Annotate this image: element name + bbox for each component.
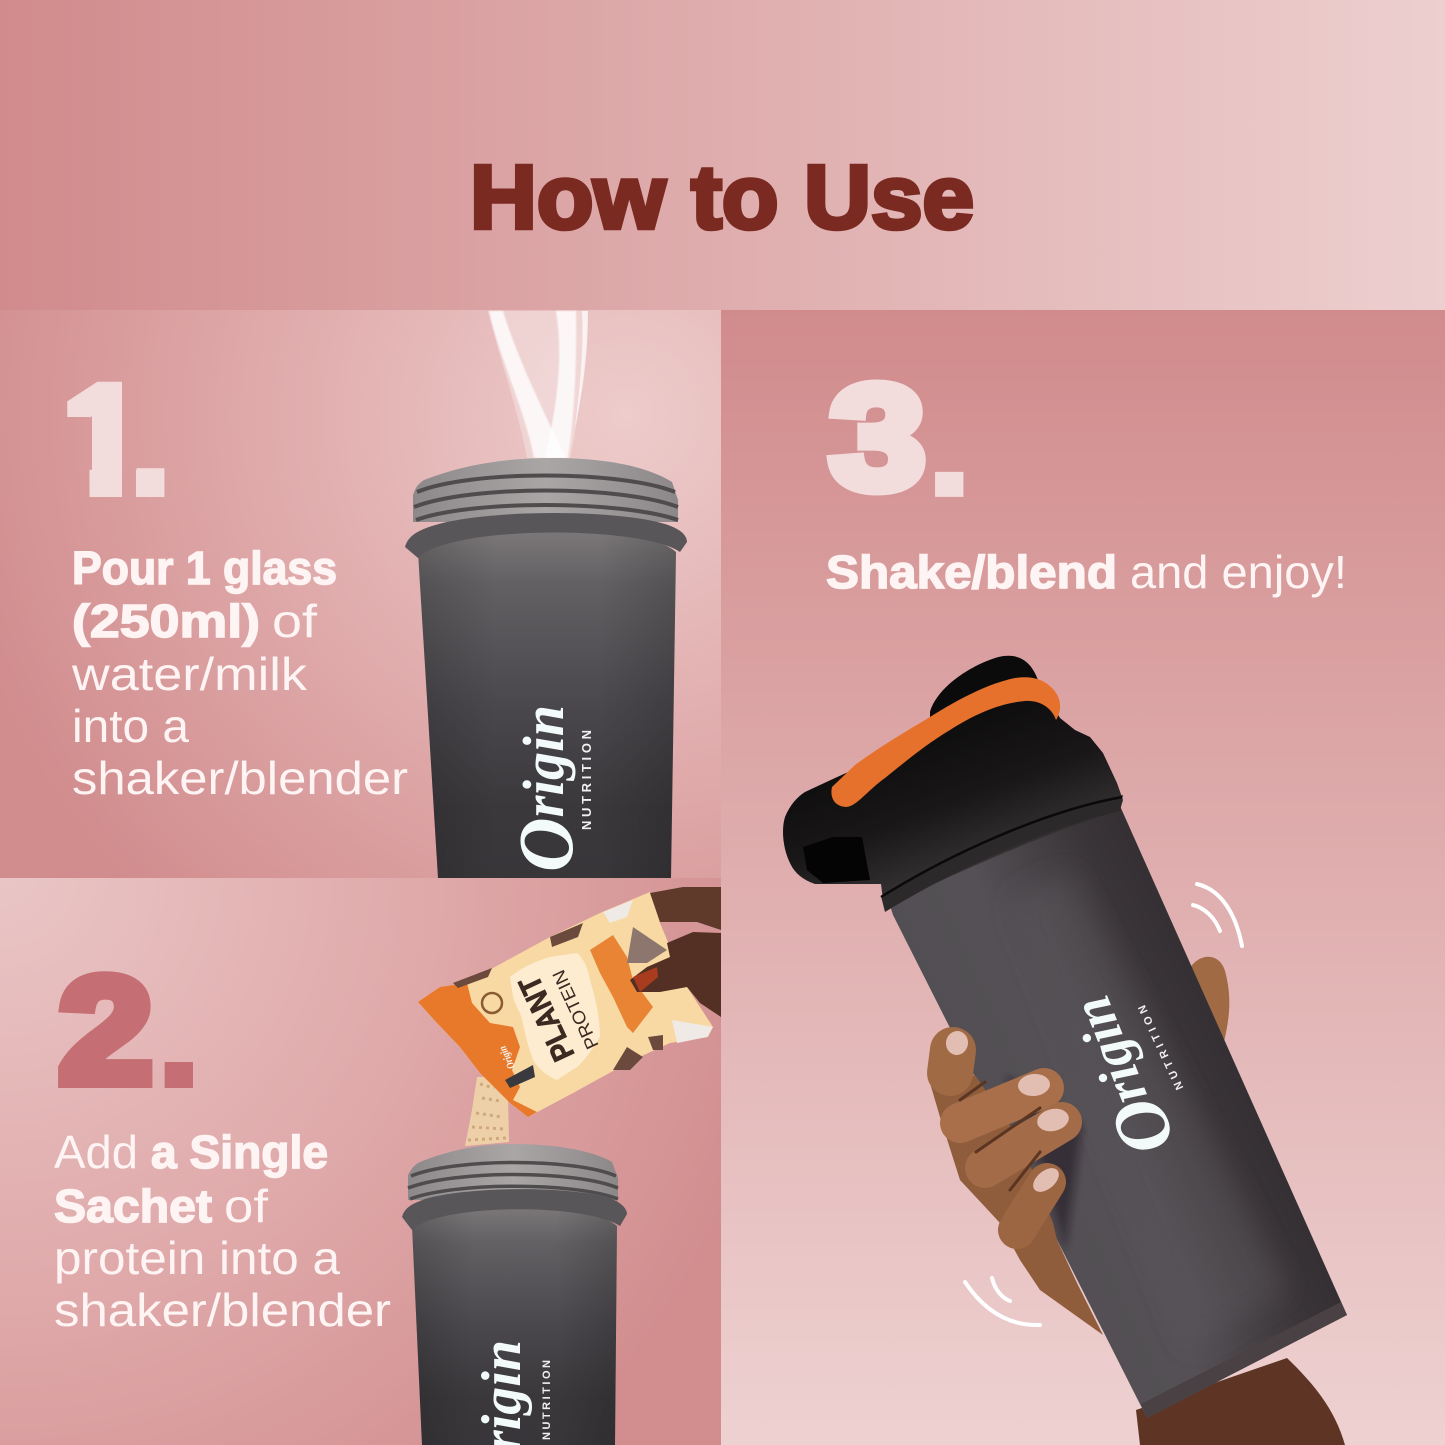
shaker 1 logo: rigin [511, 705, 576, 817]
bottle logo: rigin [1060, 988, 1159, 1113]
sachet cream label [510, 953, 600, 1080]
sachet brand: Origin [497, 1044, 518, 1071]
step 3 number: 3 [830, 355, 925, 519]
step 2 number: 2 [59, 946, 152, 1114]
step 2 instructions: protein into a [54, 1232, 340, 1284]
panel: step 3 [721, 310, 1445, 1445]
orange strap [831, 677, 1060, 807]
shaker bottle 3 [783, 656, 1347, 1418]
step 2 instructions: shaker/blender [54, 1284, 391, 1336]
step 1 instructions [71, 542, 408, 804]
shaker 2 logo [481, 1342, 550, 1445]
step 2 instructions: Sachet [54, 1180, 212, 1232]
sachet badge [482, 993, 502, 1013]
shaker 2 logo: NUTRITION [541, 1360, 553, 1440]
step 3 instructions: Shake/blend [826, 546, 1117, 598]
step 3 instructions [826, 546, 1347, 598]
sachet black tag [505, 1065, 535, 1088]
step 2 instructions: Add [54, 1126, 138, 1178]
sachet product name [517, 970, 598, 1063]
bottle logo: O [1094, 1085, 1192, 1167]
thumb behind shaker [1190, 957, 1229, 1042]
sachet orange info panel [590, 935, 653, 1033]
title: How to Use [470, 148, 974, 248]
water stream [488, 311, 588, 458]
sachet product name: PLANT [512, 970, 581, 1067]
shaker 1 logo [520, 708, 591, 870]
step 1 instructions: into a [72, 700, 189, 752]
shaker 1 logo: NUTRITION [579, 730, 594, 830]
panel: step 2 [0, 878, 721, 1445]
fingernails [944, 1029, 1071, 1197]
step 3 instructions: and enjoy! [1130, 546, 1347, 598]
forearm [1136, 1358, 1345, 1445]
step 1 number: 1 [63, 355, 146, 523]
shaker 1 logo: O [502, 817, 589, 872]
step 1 instructions: water/milk [71, 648, 308, 700]
step 1 instructions: of [272, 595, 317, 647]
protein sachet [418, 892, 713, 1117]
bottle lid [783, 656, 1123, 912]
shaker cup 2 [402, 1144, 627, 1445]
step 2 number: . [164, 998, 194, 1103]
panel: header band [0, 0, 1445, 311]
panel: step 1 [0, 310, 721, 878]
bottle logo [1052, 983, 1192, 1167]
motion lines upper right [1193, 884, 1242, 946]
step 2 instructions: of [224, 1180, 268, 1232]
hand holding sachet [630, 887, 721, 1017]
handle opening [803, 837, 870, 883]
step 2 instructions: a Single [151, 1126, 328, 1178]
step 1 instructions: Pour 1 glass [72, 542, 337, 594]
bottle body [885, 780, 1347, 1418]
step 3 number: . [935, 411, 964, 510]
step 1 instructions: (250ml) [72, 595, 260, 647]
motion lines lower left [965, 1278, 1040, 1325]
sachet orange panel left [418, 983, 537, 1117]
step 2 instructions [54, 1126, 391, 1336]
bottle logo: NUTRITION [1136, 1003, 1186, 1091]
hand gripping shaker [930, 1029, 1103, 1335]
shaker cup 1 [405, 458, 687, 878]
powder stream [465, 1077, 509, 1146]
sachet product name: PROTEIN [549, 967, 603, 1052]
step 1 number: . [135, 390, 166, 515]
step 1 instructions: shaker/blender [72, 752, 408, 804]
chocolate pieces [453, 923, 663, 1070]
